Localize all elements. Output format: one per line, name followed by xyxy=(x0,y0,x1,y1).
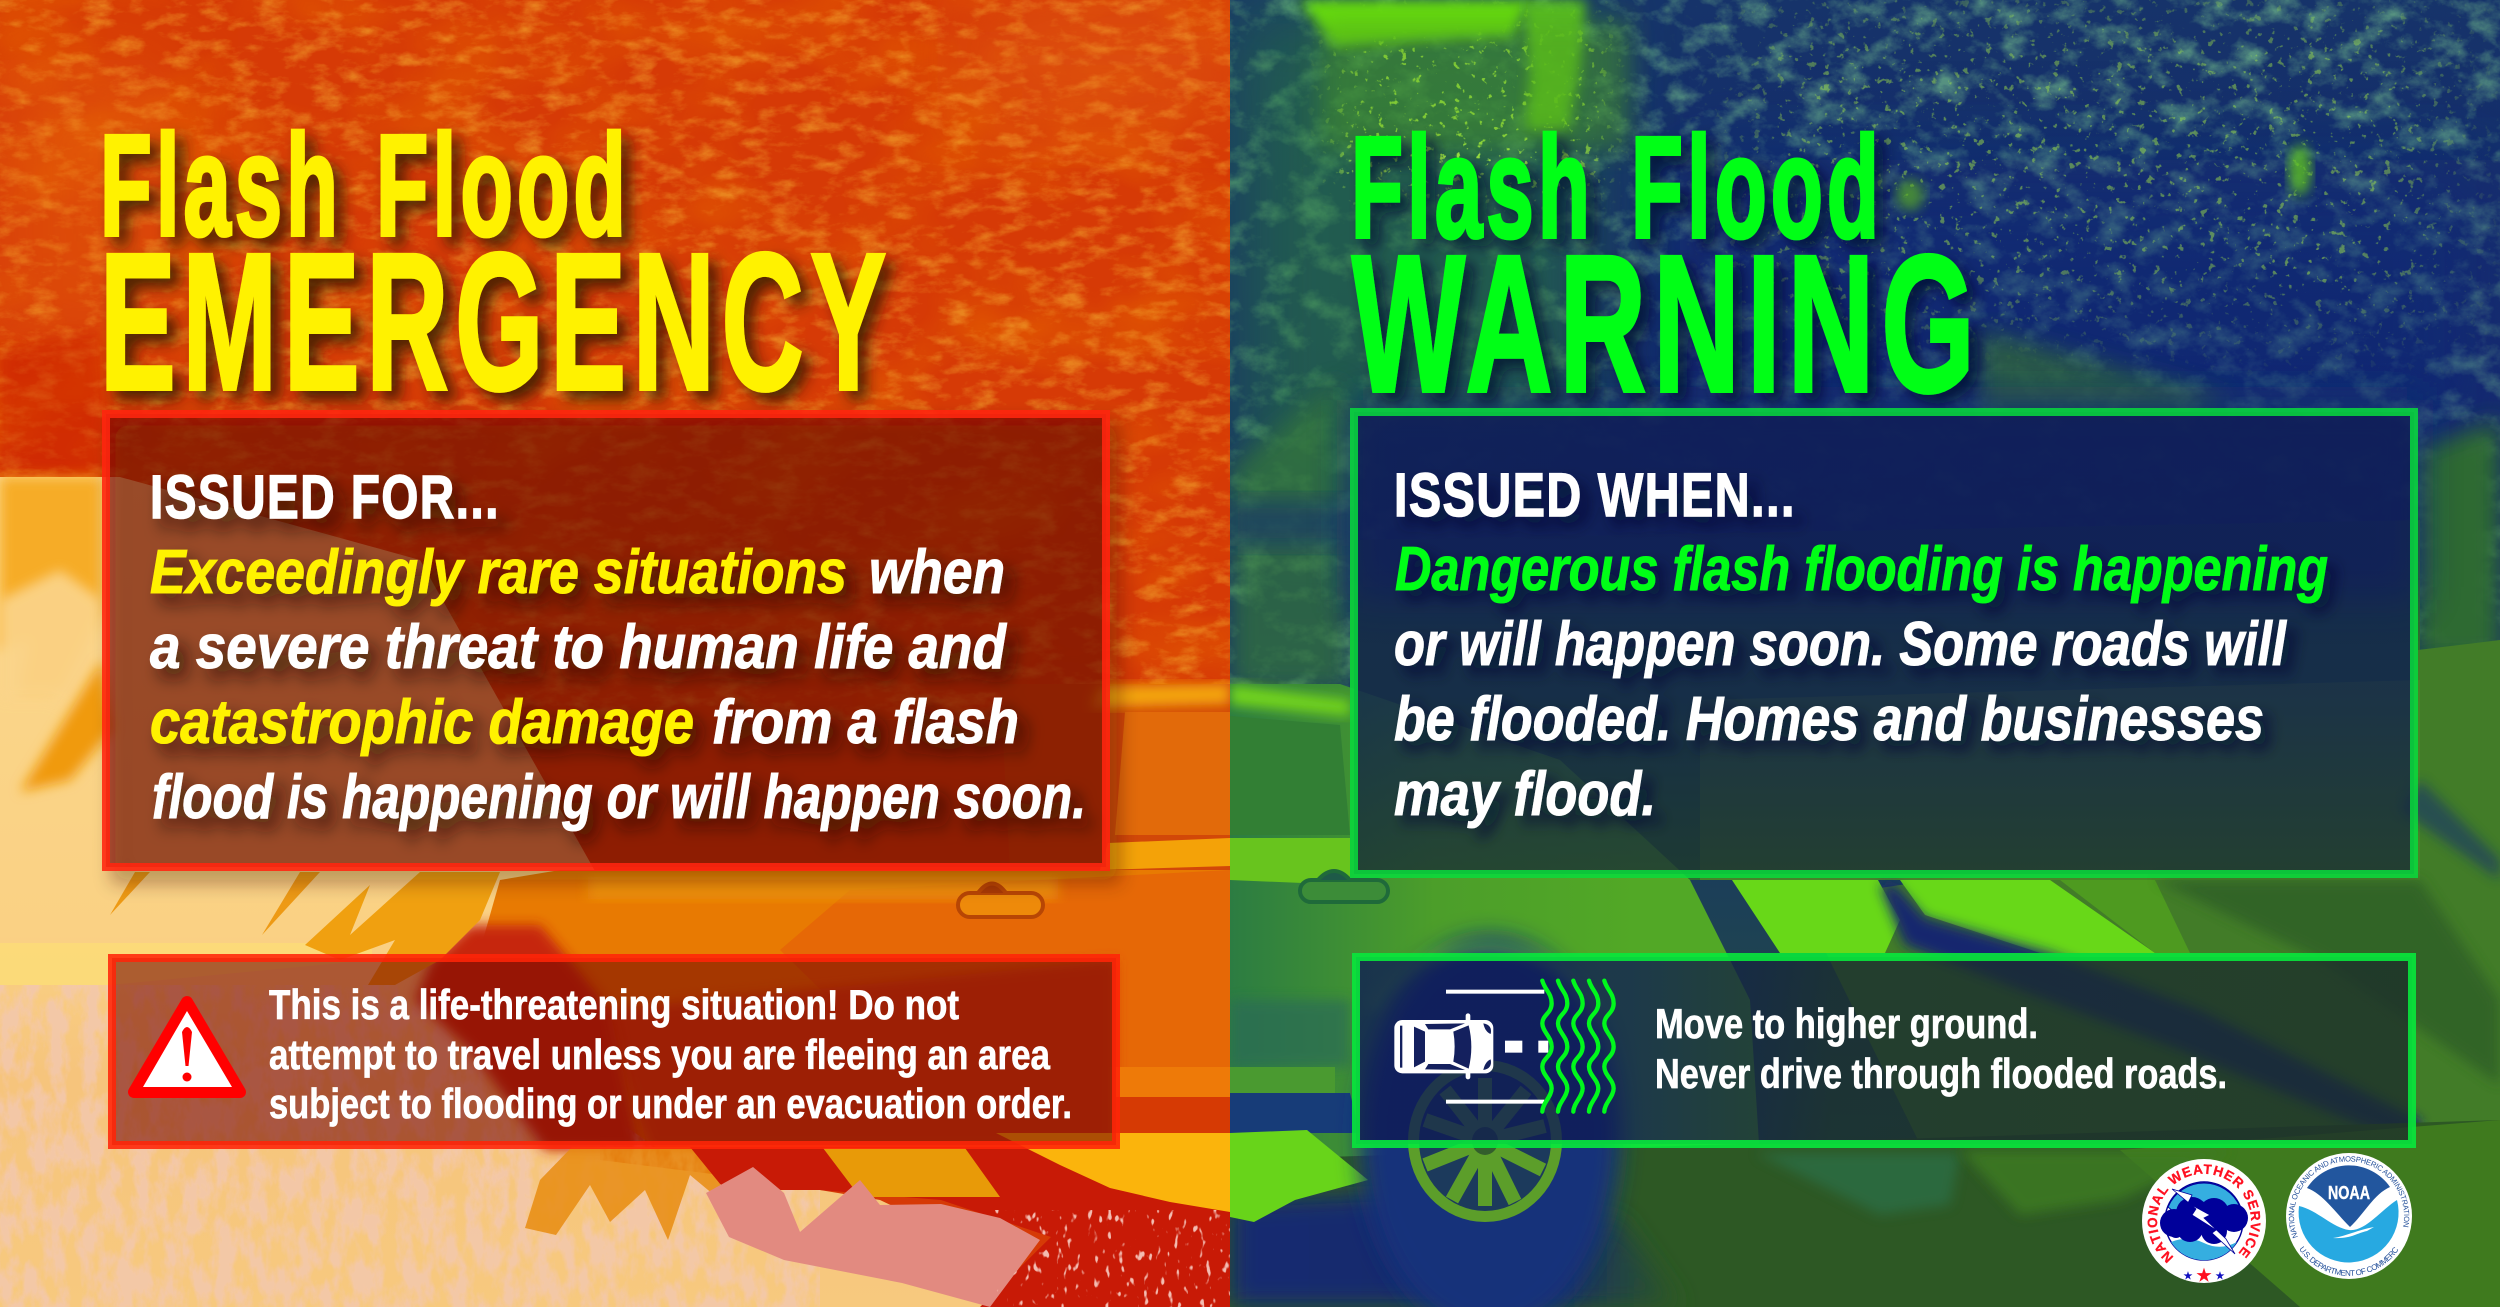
navy diagonal shadow xyxy=(1880,885,2420,1150)
bright road patches xyxy=(1732,880,1900,953)
text block: issued for description: a severe threat to human life and xyxy=(150,613,1007,682)
text block: issued for description: ISSUED FOR... xyxy=(150,463,500,531)
wheel rim and spokes xyxy=(1408,1060,1562,1222)
logo: National Weather Service: ★ xyxy=(2196,1266,2212,1285)
text block: issued when description: ISSUED WHEN... xyxy=(1394,461,1796,529)
car body green xyxy=(1230,684,1760,1160)
text block: safety advice: Never drive through flooded roads. xyxy=(1655,1050,2227,1097)
heading: Flash Flood Warning: WARNING xyxy=(1352,215,1982,433)
dark red blotch and orange brush xyxy=(415,925,640,1150)
logo: NOAA: U.S. DEPARTMENT OF COMMERCE xyxy=(2300,1246,2398,1276)
logo: NOAA xyxy=(2286,1153,2412,1279)
panel: issued for box xyxy=(106,414,1106,867)
text block: issued for description: from a flash xyxy=(712,688,1019,757)
text block: safety advice: Move to higher ground. xyxy=(1655,1000,2038,1047)
heading: Flash Flood Emergency xyxy=(100,105,893,431)
text block: issued when description: or will happen soon. Some roads will xyxy=(1394,610,2287,679)
heading: Flash Flood Warning: Flood xyxy=(1631,107,1883,268)
text block: issued for description: catastrophic damage xyxy=(150,688,694,757)
callout: life-threatening notice xyxy=(112,958,1116,1145)
cream road and grass xyxy=(0,477,1060,1307)
heading: Flash Flood Emergency: EMERGENCY xyxy=(100,213,893,431)
panel: issued when box xyxy=(1354,412,2414,874)
brush strokes xyxy=(525,1147,720,1240)
heading: Flash Flood Warning: Flash xyxy=(1351,107,1594,268)
text block: notice message: subject to flooding or under an evacuation order. xyxy=(269,1080,1072,1127)
text block: issued for description: when xyxy=(869,538,1005,607)
background: red-orange emergency photo panel xyxy=(0,0,1230,1307)
text block: issued when description: be flooded. Homes and businesses xyxy=(1394,685,2264,754)
text block: notice message xyxy=(269,981,1072,1127)
wheel arch red, amber, yellow and pink scratches xyxy=(690,1147,1230,1307)
bright sky patch xyxy=(1299,0,1530,47)
logo: NOAA: NATIONAL OCEANIC AND ATMOSPHERIC ADMINISTRATION xyxy=(2288,1156,2410,1238)
text block: issued for description: Exceedingly rare situations xyxy=(150,538,847,607)
logo: National Weather Service: ★ xyxy=(2216,1271,2225,1282)
bright bottom-left wedge xyxy=(1230,1130,1368,1222)
bottom dark ground xyxy=(1230,1120,2500,1307)
text block: safety advice xyxy=(1655,1000,2227,1097)
text block: issued for description xyxy=(150,463,1086,832)
text block: issued when description: may flood. xyxy=(1394,760,1656,829)
text block: issued when description xyxy=(1394,461,2328,829)
car body orange xyxy=(470,870,1230,1150)
heading: Flash Flood Emergency: Flood xyxy=(376,105,630,266)
mid hill, rock and road xyxy=(1980,330,2230,420)
text block: notice message: attempt to travel unless you are fleeing an area xyxy=(269,1031,1051,1078)
heading: Flash Flood Emergency: Flash xyxy=(100,105,342,266)
background: blue-green warning photo panel xyxy=(1230,0,2500,1307)
car roof and windows xyxy=(1029,684,1230,870)
callout: move to higher ground xyxy=(1356,957,2412,1144)
text block: issued for description: flood is happening or will happen soon. xyxy=(152,763,1086,832)
text block: notice message: This is a life-threatening situation! Do not xyxy=(269,981,959,1028)
wheel arch and tyre xyxy=(1360,937,1620,1307)
logo: National Weather Service: NATIONAL WEATHER SERVICE xyxy=(2148,1164,2261,1264)
icon: warning triangle xyxy=(134,1002,240,1092)
door handle xyxy=(958,884,1043,917)
icon: car driving toward flood water xyxy=(1394,981,1614,1112)
heading: Flash Flood Warning xyxy=(1351,107,1982,433)
door handle green xyxy=(1300,871,1388,902)
logo: NOAA: NOAA xyxy=(2328,1183,2370,1203)
logo: National Weather Service: ★ xyxy=(2184,1271,2193,1282)
